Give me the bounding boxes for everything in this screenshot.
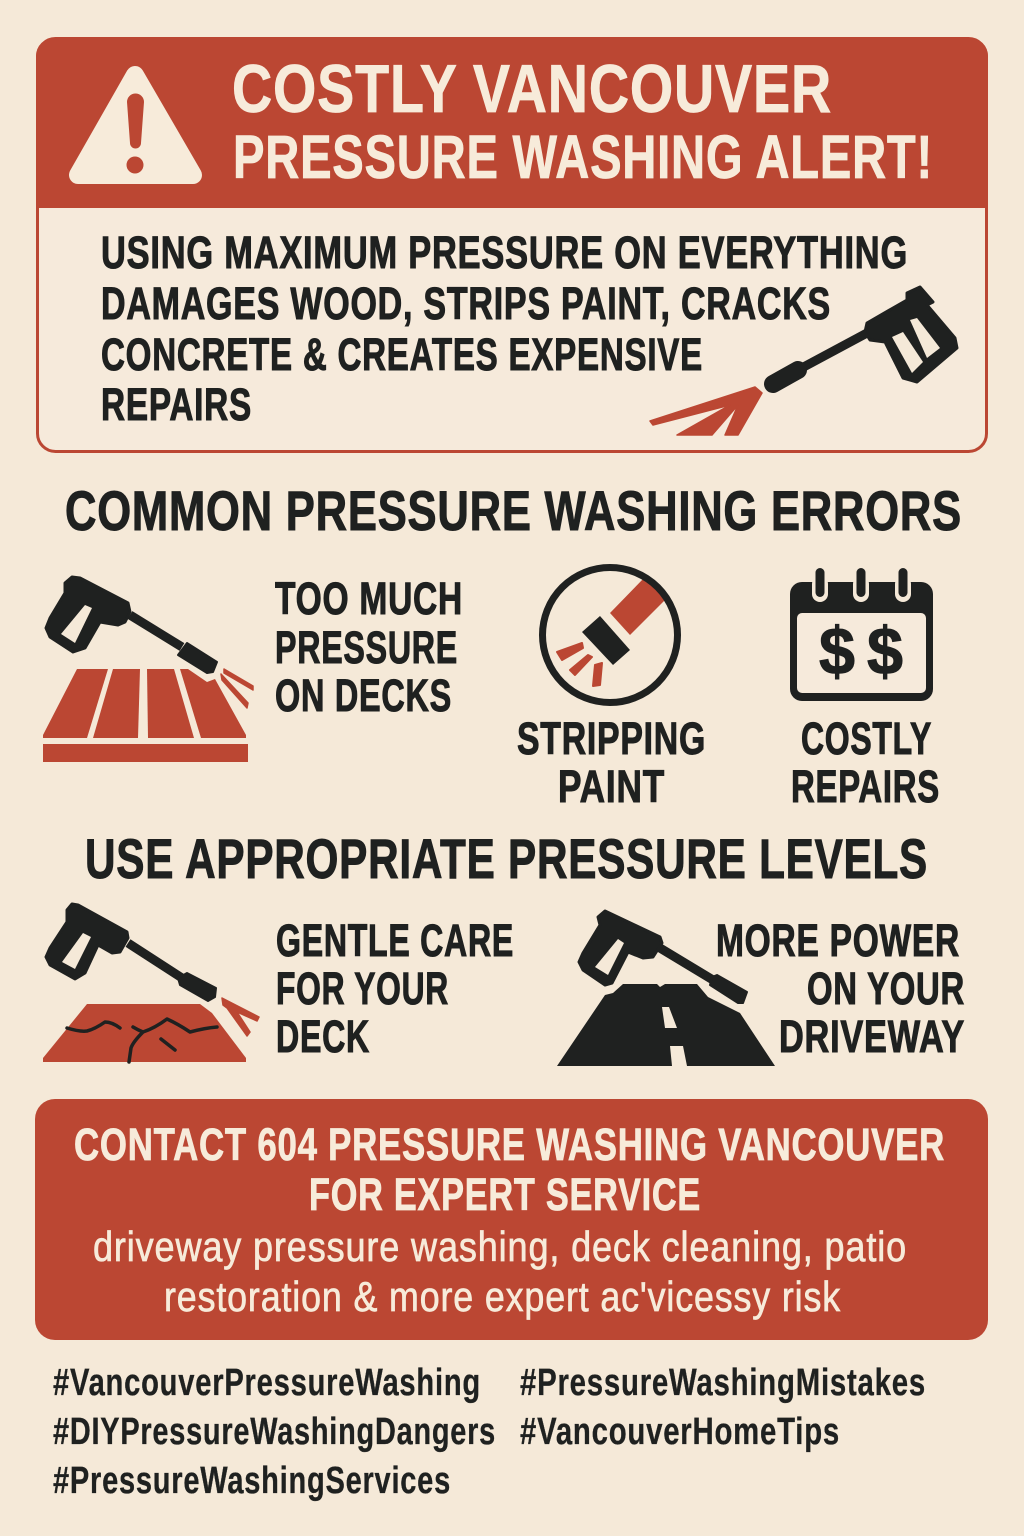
panel: contact banner — [35, 1099, 988, 1340]
text block: hashtags: #DIYPressureWashingDangers — [53, 1411, 496, 1453]
text block: services — [93, 1223, 907, 1320]
title: COSTLY VANCOUVER — [232, 51, 832, 127]
icon: calendar with dollars: $ — [867, 614, 903, 689]
label: stripping paint — [517, 713, 706, 812]
text block: alert message: REPAIRS — [101, 379, 252, 430]
icon: washer over cracked deck — [43, 904, 259, 1062]
icon: calendar with dollars: $ — [819, 614, 855, 689]
label: too much pressure on decks: PRESSURE — [275, 622, 458, 673]
icon: pressure washer with spray — [650, 287, 957, 435]
label: too much pressure on decks: TOO MUCH — [275, 573, 463, 624]
panel: more power on driveway — [557, 911, 965, 1066]
label: stripping paint: STRIPPING — [517, 713, 706, 764]
label: gentle care for your deck: GENTLE CARE — [276, 915, 514, 966]
text block: services: driveway pressure washing, deck cleaning, patio — [93, 1223, 907, 1270]
text block: hashtags: #VancouverHomeTips — [520, 1411, 840, 1453]
label: more power on your driveway: DRIVEWAY — [779, 1011, 965, 1062]
label: gentle care for your deck — [276, 915, 514, 1062]
label: costly repairs: REPAIRS — [791, 761, 940, 812]
text block: alert message — [101, 227, 908, 430]
title — [232, 51, 933, 191]
icon: paint brush in circle — [542, 568, 678, 702]
panel: gentle care for deck — [43, 904, 514, 1062]
label: costly repairs — [791, 713, 940, 812]
label: gentle care for your deck: FOR YOUR — [276, 963, 449, 1014]
text block: services: restoration & more expert ac'vicessy risk — [164, 1273, 841, 1320]
label: costly repairs: COSTLY — [801, 713, 932, 764]
icon: calendar with dollars — [790, 568, 933, 701]
label: too much pressure on decks — [275, 573, 463, 721]
text block: contact heading — [74, 1119, 945, 1220]
label: more power on your driveway — [716, 915, 965, 1062]
panel: stripping paint — [517, 568, 706, 812]
icon: washer over deck planks — [43, 577, 253, 762]
panel: costly repairs — [790, 568, 940, 812]
text block: alert message: CONCRETE & CREATES EXPENSIVE — [101, 329, 703, 380]
text block: hashtags: #VancouverPressureWashing — [53, 1362, 481, 1404]
label: too much pressure on decks: ON DECKS — [275, 670, 452, 721]
icon: washer over driveway — [557, 911, 775, 1066]
panel: alert header — [36, 38, 988, 452]
panel: too much pressure on decks — [43, 573, 463, 762]
label: stripping paint: PAINT — [558, 761, 665, 812]
icon: warning triangle — [78, 75, 193, 175]
text block: hashtags: #PressureWashingServices — [53, 1460, 451, 1502]
label: gentle care for your deck: DECK — [276, 1011, 370, 1062]
label: more power on your driveway: ON YOUR — [807, 963, 965, 1014]
text block: hashtags — [53, 1362, 926, 1502]
text block: contact heading: FOR EXPERT SERVICE — [309, 1169, 701, 1220]
